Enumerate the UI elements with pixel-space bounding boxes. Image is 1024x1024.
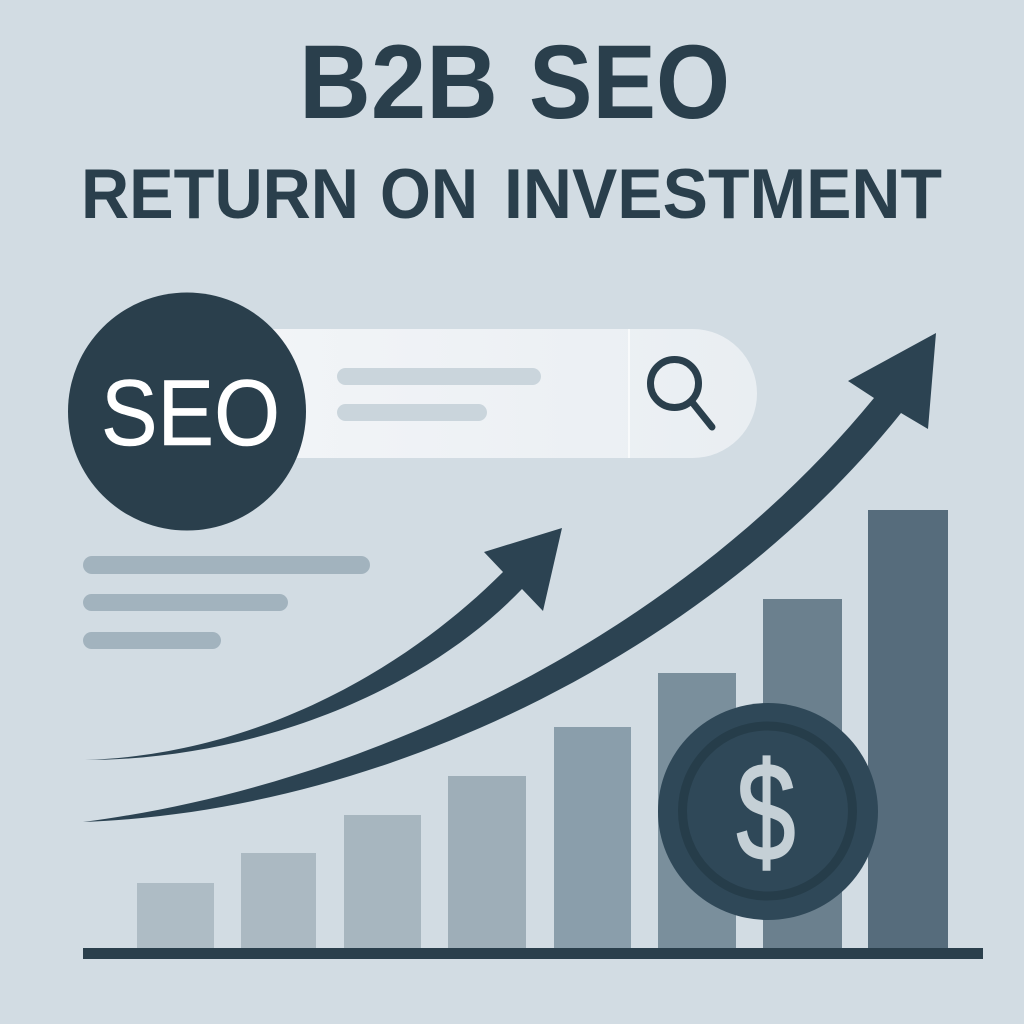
title: B2B [299, 24, 498, 141]
title: SEO [529, 24, 730, 141]
SEO badge: SEO [101, 360, 280, 465]
search bar [200, 329, 757, 458]
bar chart [137, 510, 948, 948]
subtitle: ON [380, 154, 478, 233]
search text placeholder lines [337, 368, 541, 421]
text placeholder lines [83, 556, 370, 649]
search bar divider [628, 329, 630, 458]
SEO badge [68, 292, 306, 530]
icon: dollar coin [658, 703, 878, 920]
chart baseline [83, 948, 983, 959]
subtitle [81, 154, 942, 233]
lower arrow [83, 333, 936, 822]
icon: magnifying glass [650, 360, 712, 427]
upper arrow [85, 528, 562, 760]
subtitle: INVESTMENT [504, 154, 942, 233]
subtitle: RETURN [81, 154, 359, 233]
icon: dollar coin: $ [736, 734, 796, 890]
title [299, 24, 730, 141]
